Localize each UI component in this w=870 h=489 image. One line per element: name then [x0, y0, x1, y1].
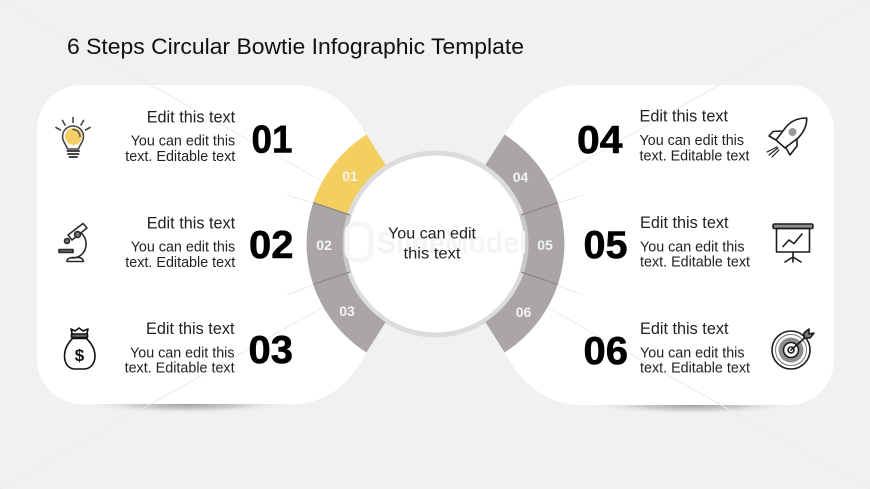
step 05 text: You can edit this	[640, 239, 744, 255]
step 04 text: Edit this text	[640, 108, 728, 126]
step 05 text: text. Editable text	[640, 255, 750, 271]
arc segment 03: 03	[339, 303, 355, 319]
arc segment 01	[313, 135, 386, 214]
icon: money bag	[64, 328, 95, 369]
step 05 number: 05	[584, 224, 628, 267]
step 05 text	[640, 214, 750, 271]
step 06 text: text. Editable text	[640, 361, 750, 377]
step 06 number: 06	[584, 330, 628, 373]
step 03 text	[125, 320, 235, 377]
arc segment 06: 06	[516, 304, 531, 320]
icon: microscope	[59, 224, 87, 262]
step 03 text: text. Editable text	[125, 361, 235, 377]
center ring	[342, 150, 529, 338]
step 01 number: 01	[252, 118, 292, 161]
center text: You can edit	[388, 226, 477, 242]
step 06 text: You can edit this	[640, 345, 744, 361]
step 06 text: Edit this text	[640, 320, 729, 338]
step 02 text: You can edit this	[131, 240, 235, 256]
panel: right steps	[435, 85, 834, 405]
step 02 text: text. Editable text	[125, 255, 235, 271]
step 01 text: You can edit this	[131, 134, 235, 150]
step 02 text: Edit this text	[147, 214, 236, 232]
arc segment 04: 04	[513, 169, 528, 185]
icon: target	[772, 329, 814, 369]
step 02 number: 02	[249, 224, 294, 267]
panel: left steps	[37, 85, 435, 404]
step 01 text: Edit this text	[147, 108, 236, 126]
step 05 text: Edit this text	[640, 214, 729, 232]
step 02 text	[125, 214, 236, 271]
arc segment 03	[313, 273, 386, 352]
center text: this text	[404, 246, 461, 262]
center text	[388, 226, 477, 262]
step 04 number: 04	[577, 119, 623, 162]
arc segment 04	[485, 135, 558, 214]
arc segment 05	[524, 203, 564, 284]
step 03 text: You can edit this	[130, 345, 234, 361]
title: 6 Steps Circular Bowtie Infographic Template	[67, 34, 524, 59]
step 03 number: 03	[248, 329, 293, 372]
arc segment 01: 01	[342, 168, 358, 184]
arc segment 05: 05	[537, 237, 553, 253]
shadow: right panel	[587, 396, 797, 414]
watermark: SlideModel	[377, 225, 527, 260]
icon: money bag: $	[75, 346, 85, 365]
step 06 text	[640, 320, 750, 377]
arc segment 02	[307, 203, 347, 284]
arc segment 02: 02	[316, 237, 332, 253]
step 01 text	[125, 108, 236, 165]
icon: rocket	[767, 118, 807, 157]
step 01 text: text. Editable text	[125, 149, 235, 165]
icon: presentation board	[773, 224, 813, 262]
arc segment 06	[485, 273, 558, 352]
icon: light bulb	[56, 118, 90, 157]
step 04 text	[640, 108, 750, 164]
step 04 text: text. Editable text	[640, 148, 750, 164]
shadow: left panel	[83, 394, 293, 414]
step 03 text: Edit this text	[146, 320, 235, 338]
step 04 text: You can edit this	[640, 133, 744, 149]
